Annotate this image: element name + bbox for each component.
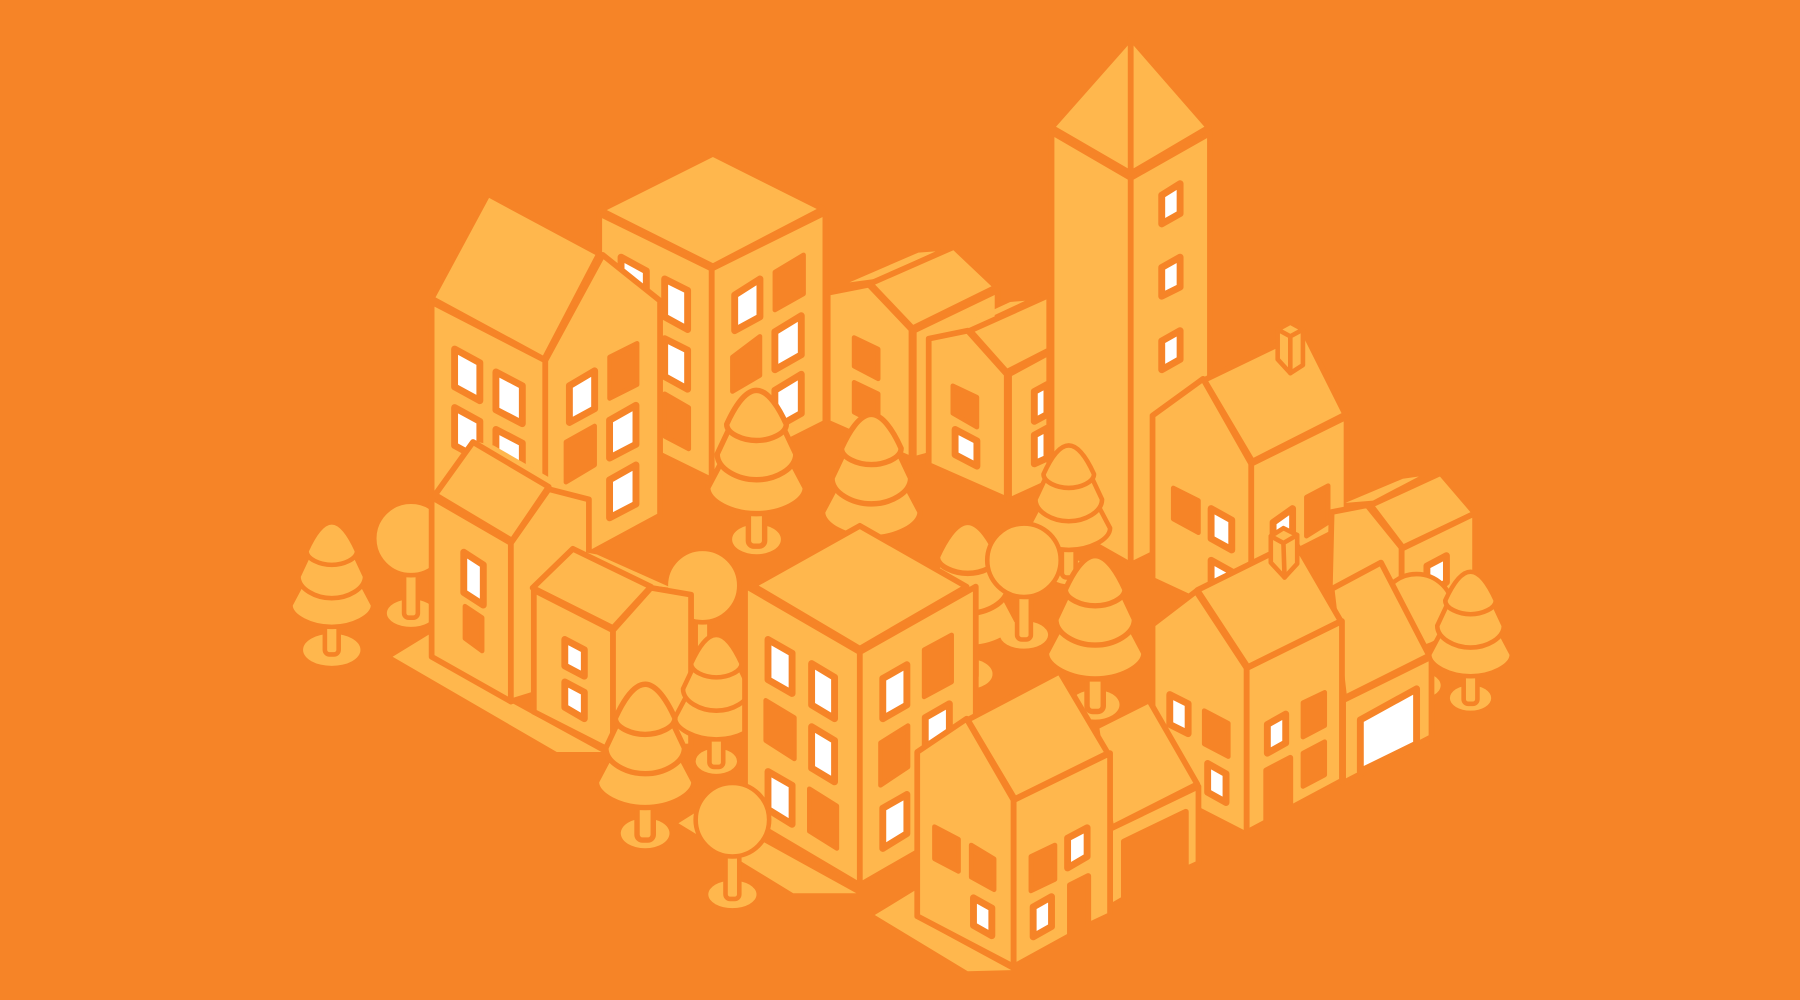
tree: far left pine <box>290 522 373 666</box>
building: tall tower <box>1052 38 1210 565</box>
building: top centre apartment block <box>599 154 825 480</box>
shadow: centre block ground <box>678 781 856 893</box>
tree: round behind lower-left house <box>666 549 739 674</box>
tree: pine top centre <box>708 390 805 554</box>
building: far right garage with white door <box>1332 563 1432 783</box>
building: garage behind front house <box>1096 700 1198 907</box>
building: lower-left house <box>533 549 691 752</box>
garage door <box>1360 689 1417 772</box>
building: far right small house <box>1329 473 1475 629</box>
building: big centre block <box>745 526 976 885</box>
building: left gabled house <box>432 194 660 577</box>
tree: pine behind centre block <box>918 522 1017 689</box>
building: right house with chimney <box>1153 323 1347 626</box>
building: small gabled house behind tower, far <box>828 247 998 459</box>
building: narrow house, left <box>432 441 589 701</box>
tree: round far left <box>374 502 448 627</box>
icon: chimney on front right house <box>1271 528 1297 577</box>
tree: round right of centre <box>987 524 1061 649</box>
tree: pine far right <box>1429 572 1512 711</box>
tree: pine right of centre <box>1027 445 1110 584</box>
scene: isometric town <box>290 38 1512 971</box>
shadow: left house ground <box>393 631 602 752</box>
tree: pine top centre right <box>823 414 920 578</box>
building: front gabled house <box>917 672 1110 967</box>
tree: pine left of big block <box>675 635 758 774</box>
building: front right house with chimney <box>1153 528 1342 835</box>
tree: large pine lower left <box>596 684 694 848</box>
shadow: front house ground <box>875 890 1011 971</box>
tree: large pine centre right <box>1046 556 1144 720</box>
building: small gabled house behind tower, near <box>929 295 1049 501</box>
tree: round lower centre <box>696 783 769 908</box>
icon: chimney on right house <box>1278 323 1303 373</box>
tree: round, behind far right <box>1380 574 1453 699</box>
